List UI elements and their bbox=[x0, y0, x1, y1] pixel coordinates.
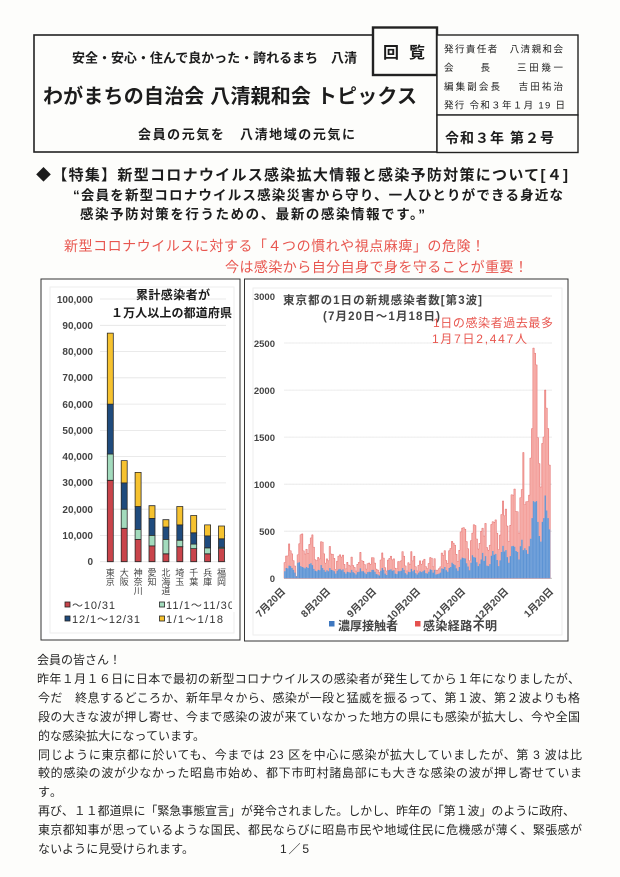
chart title: 累計感染者が bbox=[136, 287, 210, 302]
page number: 1／5 bbox=[280, 842, 309, 856]
body text: 段の大きな波が押し寄せ、今まで感染の波が来ていなかった地方の県にも感染が拡大し、今や全国 bbox=[38, 709, 580, 724]
publisher info box: 編集副会長 吉田祐治 bbox=[444, 81, 563, 93]
y axis labels: 20,000 bbox=[62, 505, 93, 516]
y axis labels: 2000 bbox=[254, 386, 275, 397]
body text: ないように見受けられます。 bbox=[38, 842, 194, 856]
body text: 同じように東京都に於いても、今までは 23 区を中心に感染が拡大していましたが、第 3 波は比 bbox=[38, 747, 582, 762]
peak annotation: 1月7日2,447人 bbox=[432, 332, 527, 346]
section heading: ◆【特集】新型コロナウイルス感染拡大情報と感染予防対策について[４] bbox=[36, 166, 568, 184]
circulation stamp box bbox=[373, 28, 437, 75]
panel: masthead bbox=[34, 28, 578, 152]
red warning text: 今は感染から自分自身で身を守ることが重要！ bbox=[225, 259, 528, 275]
chart title: (7月20日～1月18日) bbox=[323, 310, 440, 323]
chart title bbox=[111, 287, 232, 320]
publisher info box bbox=[437, 35, 578, 115]
y axis labels: 80,000 bbox=[62, 347, 93, 358]
category labels: 兵庫 bbox=[203, 567, 212, 587]
legend: 1/1～1/18 bbox=[166, 614, 223, 626]
peak annotation bbox=[432, 315, 553, 346]
peak annotation: 1日の感染者過去最多 bbox=[433, 315, 553, 330]
publisher info box: 発行 令和３年１月 19 日 bbox=[444, 100, 565, 112]
publisher info box: 発行責任者 八清親和会 bbox=[444, 44, 563, 56]
y axis labels bbox=[57, 295, 93, 568]
y axis labels: 2500 bbox=[254, 339, 275, 350]
y axis labels: 70,000 bbox=[62, 373, 93, 384]
y axis labels: 0 bbox=[270, 574, 275, 585]
close-contact cases series bbox=[284, 495, 550, 578]
body text: 較的感染の波が少なかった昭島市始め、都下市町村諸島部にも大きな感染の波が押し寄せていま bbox=[38, 765, 582, 780]
category labels: 神奈川 bbox=[134, 567, 143, 596]
issue number box: 令和３年 第２号 bbox=[445, 130, 554, 146]
body text: 東京都知事が思っているような国民、都民ならびに昭島市民や地域住民に危機感が薄く、緊張感が bbox=[38, 822, 582, 837]
legend: 12/1～12/31 bbox=[72, 614, 140, 626]
masthead subtitle: 会員の元気を 八清地域の元気に bbox=[138, 127, 355, 142]
x axis date labels: 9月20日 bbox=[345, 586, 379, 620]
red warning text bbox=[64, 238, 528, 275]
y axis labels: 60,000 bbox=[62, 400, 93, 411]
masthead main box bbox=[34, 35, 437, 152]
legend: 濃厚接触者 bbox=[338, 618, 398, 633]
body text: 今だ 終息するどころか、新年早々から、感染が一段と猛威を振るって、第１波、第２波よりも格 bbox=[38, 690, 580, 705]
legend bbox=[329, 618, 497, 633]
x axis date labels: 11月20日 bbox=[430, 586, 468, 624]
legend: ～10/31 bbox=[72, 600, 115, 612]
issue number box bbox=[437, 115, 578, 152]
y axis labels: 1500 bbox=[254, 433, 275, 444]
x axis date labels: 12月20日 bbox=[473, 586, 511, 624]
masthead slogan: 安全・安心・住んで良かった・誇れるまち 八清 bbox=[72, 50, 357, 66]
category labels: 愛知 bbox=[148, 567, 157, 587]
body text: 昨年１月１６日に日本で最初の新型コロナウイルスの感染者が発生してから１年になりましたが、 bbox=[37, 671, 580, 686]
panel: Tokyo daily new cases chart bbox=[244, 279, 568, 641]
category labels: 東京 bbox=[106, 567, 115, 587]
y axis labels: 40,000 bbox=[62, 452, 93, 463]
x axis date labels: 8月20日 bbox=[299, 586, 333, 620]
unknown-route cases series bbox=[284, 348, 550, 578]
y axis labels: 100,000 bbox=[57, 295, 93, 306]
y axis labels: 10,000 bbox=[62, 531, 93, 542]
chart title: 東京都の1日の新規感染者数[第3波] bbox=[283, 293, 482, 307]
y axis labels: 90,000 bbox=[62, 321, 93, 332]
category labels: 北海道 bbox=[161, 568, 170, 596]
y axis labels: 50,000 bbox=[62, 426, 93, 437]
panel: cumulative infections bar chart bbox=[41, 279, 240, 640]
legend: 11/1～11/30 bbox=[166, 600, 234, 612]
category labels: 大阪 bbox=[120, 567, 129, 587]
body text: 再び、１１都道県に「緊急事態宣言」が発令されました。しかし、昨年の「第１波」のように政府、 bbox=[38, 803, 575, 818]
body text: す。 bbox=[38, 785, 62, 799]
section lead text bbox=[73, 187, 563, 222]
category labels: 千葉 bbox=[189, 568, 198, 587]
category labels bbox=[106, 567, 226, 596]
y axis labels bbox=[254, 292, 275, 585]
daily stacked bars bbox=[284, 348, 550, 578]
section lead text: 感染予防対策を行うための、最新の感染情報です。” bbox=[80, 206, 425, 222]
stacked bars bbox=[107, 333, 224, 562]
chart title bbox=[283, 293, 482, 323]
body text: 会員の皆さん！ bbox=[37, 653, 121, 667]
red warning text: 新型コロナウイルスに対する「４つの慣れや視点麻痺」の危険！ bbox=[64, 238, 485, 254]
x axis date labels bbox=[254, 586, 556, 624]
publisher info box: 会 長 三田幾一 bbox=[444, 62, 563, 74]
y axis labels: 500 bbox=[259, 527, 275, 538]
legend bbox=[65, 600, 239, 626]
y axis labels: 30,000 bbox=[62, 478, 93, 489]
section lead text: “会員を新型コロナウイルス感染災害から守り、一人ひとりができる身近な bbox=[73, 187, 563, 203]
y axis labels: 3000 bbox=[254, 292, 275, 303]
chart title: １万人以上の都道府県 bbox=[111, 305, 232, 320]
legend: 感染経路不明 bbox=[423, 618, 497, 633]
y axis labels: 0 bbox=[87, 557, 93, 568]
masthead title: わがまちの自治会 八清親和会 トピックス bbox=[43, 84, 417, 108]
category labels: 福岡 bbox=[217, 567, 226, 587]
x axis date labels: 10月20日 bbox=[385, 586, 423, 624]
y axis labels: 1000 bbox=[254, 480, 275, 491]
x axis date labels: 1月20日 bbox=[522, 586, 556, 620]
body text: 的な感染拡大になっています。 bbox=[38, 728, 205, 743]
category labels: 埼玉 bbox=[175, 567, 184, 587]
body text bbox=[37, 653, 582, 856]
x axis date labels: 7月20日 bbox=[254, 586, 288, 620]
circulation stamp box: 回 覧 bbox=[383, 43, 425, 62]
